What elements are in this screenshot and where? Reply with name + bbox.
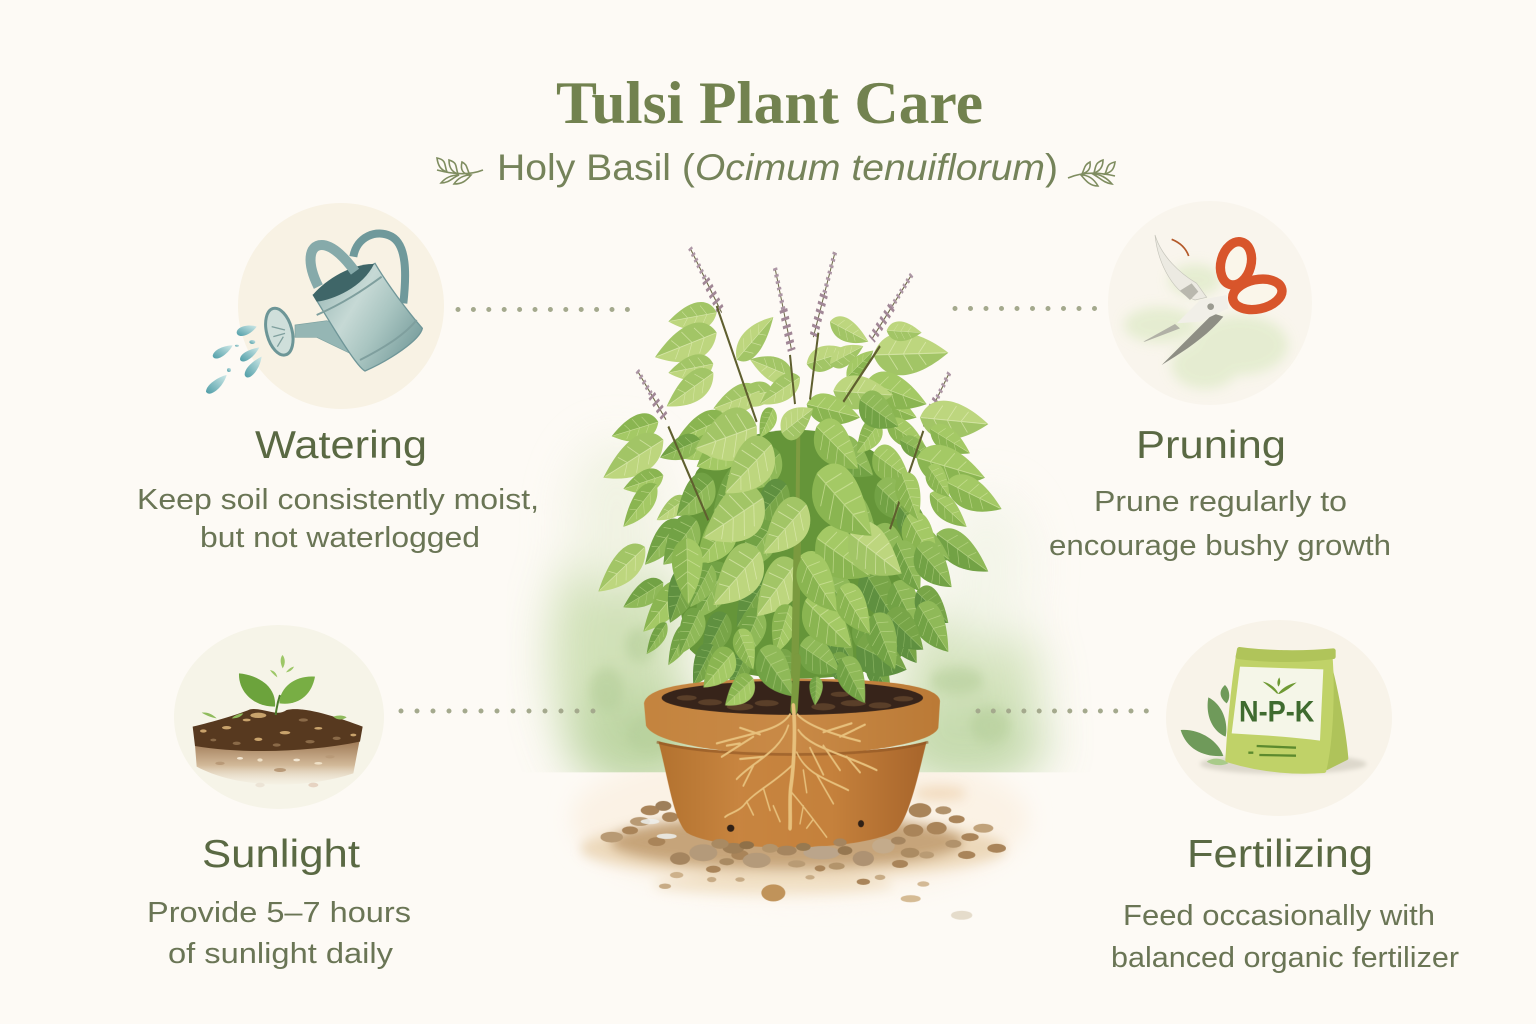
panel: sunlight (147, 625, 411, 970)
icon circle: fertilizing (1166, 620, 1392, 816)
text: fertilizing: balanced organic fertilizer (1111, 942, 1459, 974)
table surface (574, 772, 1026, 888)
icon circle: watering (238, 203, 444, 409)
text: sunlight: Provide 5–7 hours (147, 897, 411, 929)
connector: watering dots (458, 307, 628, 312)
water drops (206, 326, 262, 394)
connector: pruning dots (955, 306, 1097, 311)
text: fertilizing (1111, 900, 1459, 974)
subtitle text: Holy Basil ( Ocimum tenuiflorum ) (497, 147, 1058, 188)
pot rim (644, 679, 940, 755)
text: watering: but not waterlogged (200, 522, 480, 554)
text: pruning (1049, 486, 1391, 562)
heading: watering: Watering (255, 424, 427, 467)
heading: sunlight: Sunlight (202, 833, 360, 876)
central plant illustration (550, 248, 1047, 920)
pot body (658, 741, 927, 847)
mid leaves (891, 466, 929, 527)
front stones (659, 837, 972, 920)
title: Tulsi Plant Care (556, 70, 983, 136)
garden background (550, 440, 1047, 792)
heading: pruning: Pruning (1136, 424, 1286, 467)
connector: sunlight dots (401, 708, 596, 714)
icon: right sprig (1068, 160, 1115, 186)
clay pot (644, 679, 940, 847)
label: N-P-K: N-P-K (1239, 696, 1315, 729)
text: pruning: Prune regularly to (1094, 486, 1347, 518)
text: watering: Keep soil consistently moist, (137, 484, 539, 516)
panel: pruning (1049, 201, 1391, 562)
filler leaves (691, 422, 746, 484)
text: sunlight: of sunlight daily (168, 938, 394, 970)
panel: watering (137, 203, 539, 554)
text: fertilizing: Feed occasionally with (1123, 900, 1435, 932)
gravel (580, 787, 1007, 894)
green wash (1124, 264, 1288, 389)
icon: watering can (206, 233, 422, 394)
text: pruning: encourage bushy growth (1049, 530, 1391, 562)
icon circle: pruning (1108, 201, 1312, 405)
flower spikes (637, 248, 949, 426)
text: sunlight (147, 897, 411, 970)
roots (717, 705, 877, 837)
soil in pot (662, 681, 923, 715)
text: watering (137, 484, 539, 554)
connector: fertilizing dots (978, 708, 1150, 714)
subtitle (437, 147, 1115, 188)
low front leaves (695, 636, 875, 717)
icon: left sprig (437, 158, 483, 184)
icon circle: sunlight (174, 625, 384, 809)
side stems (668, 306, 923, 529)
heading: fertilizing: Fertilizing (1187, 833, 1373, 876)
panel: fertilizing (1111, 620, 1459, 974)
icon: N-P-K bag (1181, 649, 1367, 774)
back leaves (667, 299, 718, 335)
icon: scissors (1143, 235, 1285, 365)
foliage (591, 299, 1006, 713)
icon: soil and seedling (193, 655, 363, 787)
main stem (797, 426, 798, 542)
